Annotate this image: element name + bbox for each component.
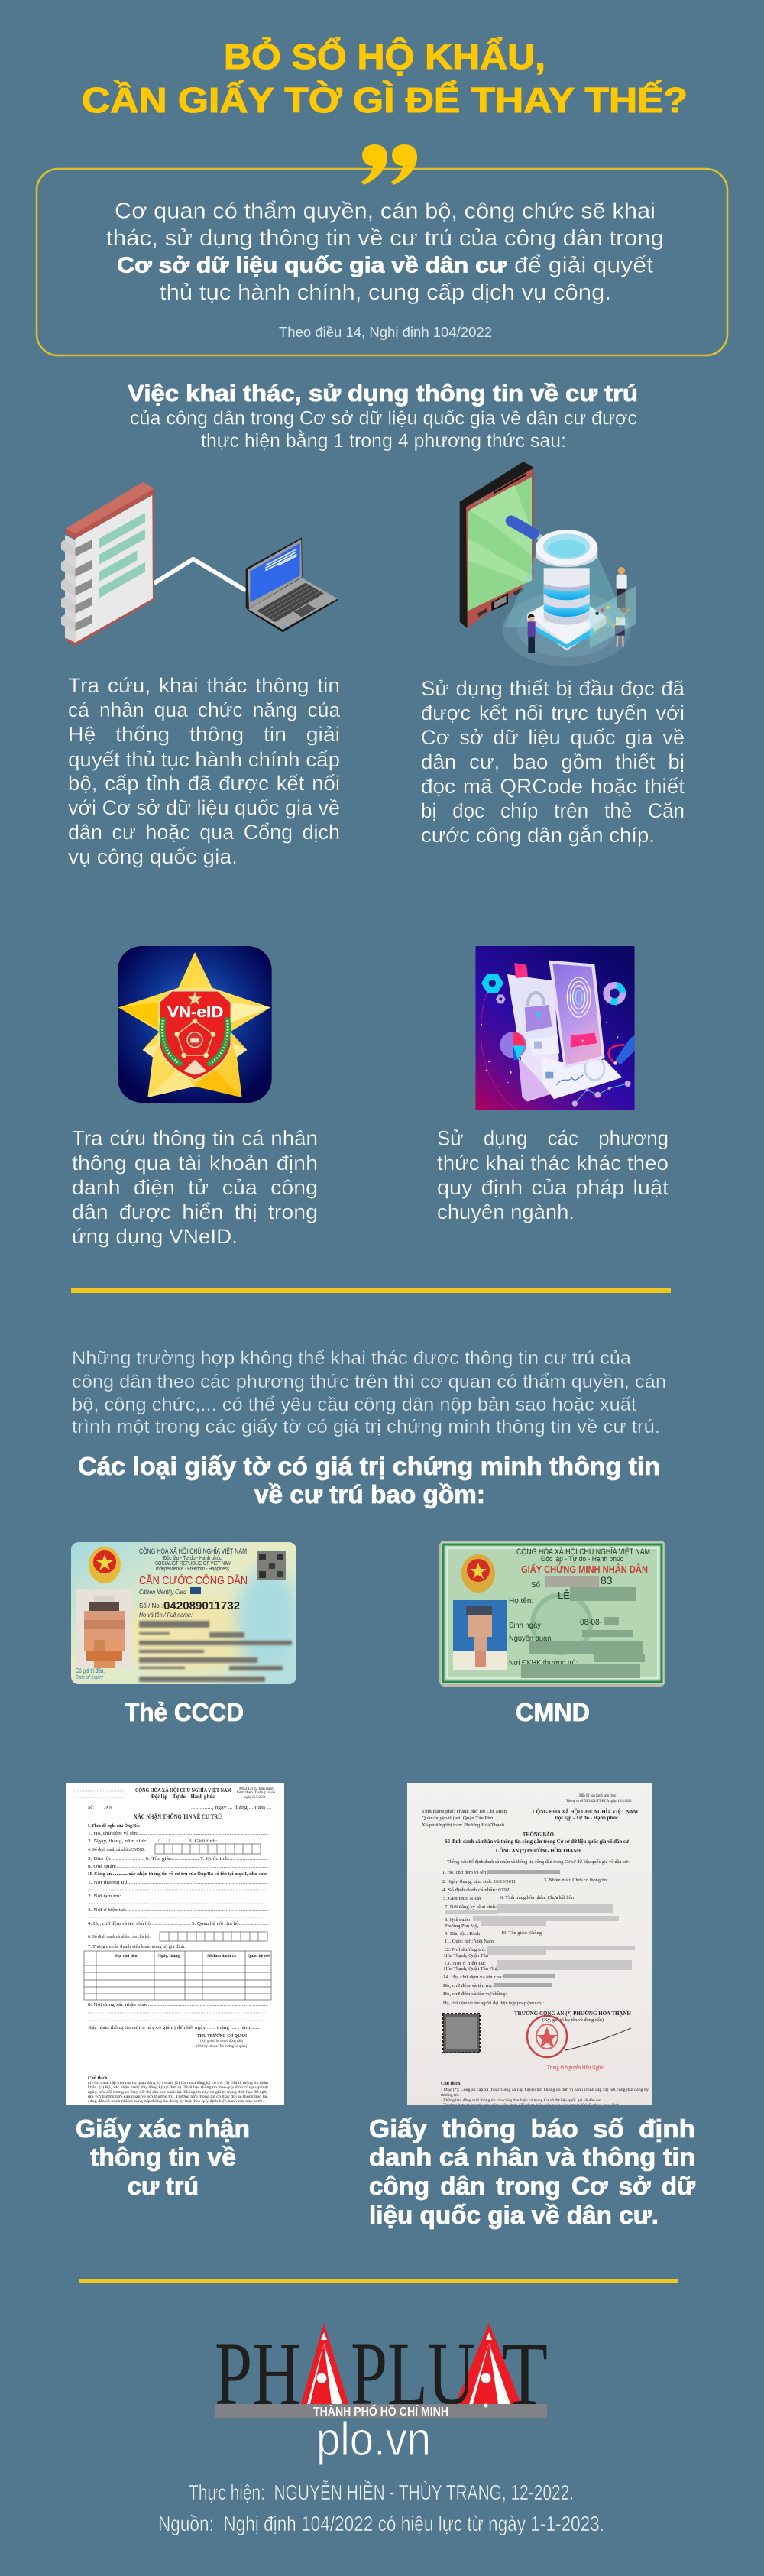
text: method 1: với Cơ sở dữ liệu quốc gia về: [68, 796, 340, 819]
image: residence confirmation form: ngày 15/5/2021: [244, 1796, 266, 1800]
image: personal identification notice: CỘNG HÒA XÃ HỘI CHỦ NGHĨA VIỆT NAM: [533, 1809, 638, 1815]
text: method 3: danh điện tử của công: [72, 1176, 318, 1199]
image: personal identification notice: 11. Quốc tịch: Việt Nam: [445, 1939, 494, 1944]
image: residence confirmation form: kèm theo Thông tư số: [237, 1791, 276, 1795]
image: residence confirmation form: (Ký, ghi rõ họ tên và đóng dấu): [200, 2040, 243, 2043]
image: residence confirmation form: công dân có trách nhiệm cung cấp thông tin đúng sự thật theo quy định hiện hành của nhà nước.: [88, 2100, 264, 2104]
image: personal identification notice: Thông tư số 59/2021/TT-BCA ngày 15/5/2021: [566, 1798, 632, 1803]
image: personal identification notice: (Ký, ghi rõ họ tên và đóng dấu): [542, 2017, 604, 2023]
image: residence confirmation form: Quan hệ với: [248, 1954, 270, 1959]
quote text: thủ tục hành chính, cung cấp dịch vụ công.: [160, 280, 611, 305]
image: old identity card: Sinh ngày: [509, 1622, 541, 1630]
image: residence confirmation form: THỦ TRƯỞNG CƠ QUAN: [197, 2033, 248, 2039]
stamp and signature: [527, 2016, 631, 2057]
logo: Pháp Luật: PLU: [351, 2324, 475, 2424]
image: personal identification notice: 14. Họ, chữ đệm và tên cha:: [443, 1975, 503, 1980]
title: [82, 37, 688, 120]
image: residence confirmation form: 4. Số định danh cá nhân/CMND:: [88, 1847, 145, 1852]
image: residence confirmation form: 6. Số định danh cá nhân của chủ hộ:: [88, 1934, 151, 1939]
image: residence confirmation form: (Chữ ký số của Thủ trưởng cơ quan): [196, 2045, 247, 2049]
text: method 1: Hệ thống thông tin giải: [68, 723, 340, 746]
credits: Nguồn: Nghị định 104/2022 có hiệu lực từ ngày 1-1-2023.: [158, 2512, 604, 2535]
image: citizen ID card: Citizen Identity Card: [139, 1589, 186, 1596]
image: citizen ID card: [71, 1542, 298, 1684]
image: personal identification notice: TRƯỞNG CÔNG AN (*) PHƯỜNG HÒA THẠNH: [514, 2011, 632, 2017]
image: personal identification notice: thường trú.: [441, 2093, 460, 2098]
image: personal identification notice: - Thông báo đồng thời thông tin của công dân hiện có trong Cơ sở dữ liệu quốc gia về dân cư.: [441, 2098, 602, 2103]
image: residence confirmation form: .............., ngày ... tháng ... năm ...: [191, 1806, 272, 1810]
text: method 2: cước công dân gắn chíp.: [421, 823, 655, 847]
image: personal identification notice: [407, 1783, 652, 2108]
image: personal identification notice: - Trường hợp thông tin của công dân thay đổi, thực hiện cập nhật vào cơ sở dữ liệu theo quy định.: [441, 2102, 621, 2108]
icon: digital security app: »: [581, 1037, 584, 1044]
image: personal identification notice: 1. Họ, chữ đệm và tên:: [442, 1870, 487, 1875]
image: personal identification notice: - Mục (*): Công an cấp xã (hoặc Công an cấp huyện nơi không có đơn vị hành chính cấp xã) nơi công dân đăng ký: [441, 2087, 649, 2092]
quote text: thác, sử dụng thông tin về cư trú của công dân trong: [106, 226, 664, 251]
image: personal identification notice: 3. Nhóm máu: Chưa có thông tin: [544, 1878, 607, 1883]
text: method 2: được kết nối trực tuyến với: [421, 702, 685, 724]
image: personal identification notice: Xã/phường/thị trấn: Phường Hòa Thạnh: [422, 1823, 505, 1828]
text: method 4: Sử dụng các phương: [437, 1126, 668, 1149]
image: residence confirmation form: 1. Nơi thường trú:...................................................................................................: [88, 1881, 269, 1885]
image: personal identification notice: 4. Số định danh cá nhân: 0792........: [442, 1887, 520, 1893]
image: citizen ID card: SOCIALIST REPUBLIC OF VIET NAM: [155, 1561, 231, 1567]
image: personal identification notice: 8. Quê quán:: [445, 1917, 471, 1923]
text: method 4: quy định của pháp luật: [437, 1176, 669, 1199]
emblem: [89, 1547, 121, 1583]
image: personal identification notice: 5. Giới tính: NAM: [443, 1896, 481, 1901]
image: personal identification notice: 13. Nơi ở hiện tại:: [444, 1961, 486, 1966]
credits: Thực hiện: NGUYỄN HIỀN - THÙY TRANG, 12-2022.: [189, 2480, 574, 2504]
image: old identity card: Độc lập - Tự do - Hạnh phúc: [541, 1555, 623, 1563]
text: method 4: chuyên ngành.: [437, 1201, 575, 1223]
logo: Pháp Luật: THÀNH PHỐ HỒ CHÍ MINH: [313, 2403, 448, 2419]
shield label: VN-eID: [167, 1003, 223, 1021]
text: method 3: dân được hiển thị trong: [72, 1201, 318, 1223]
QR code: [443, 2014, 480, 2053]
image: residence confirmation form: Mẫu CT07 ban hành: [239, 1787, 275, 1791]
credits: [158, 2480, 604, 2535]
image: personal identification notice: 12. Nơi thường trú:: [444, 1947, 486, 1952]
text block: exceptions paragraph: bộ, công chức,... có thể yêu cầu công dân nộp bản sao hoặc xuất: [72, 1395, 636, 1415]
quote text: Cơ quan có thẩm quyền, cán bộ, công chức sẽ khai: [115, 199, 656, 223]
image: personal identification notice: Phường Phú Mỹ,: [445, 1923, 479, 1929]
heading: methods: của công dân trong Cơ sở dữ liệu quốc gia về dân cư được: [130, 408, 637, 429]
text: method 3: thông qua tài khoản định: [72, 1152, 318, 1175]
portrait: [453, 1600, 507, 1670]
text: method 2: dân cư, bao gồm thiết bị: [421, 750, 685, 773]
text: method 2: Cơ sở dữ liệu quốc gia về: [421, 726, 685, 749]
portrait: [76, 1589, 132, 1668]
image: citizen ID card: Độc lập - Tự do - Hạnh phúc: [163, 1556, 222, 1561]
image: residence confirmation form: Ngày, tháng: [158, 1954, 180, 1959]
text: method 4: thức khai thác khác theo: [437, 1152, 668, 1175]
image: residence confirmation form: 3. Nơi ở hiện tại:.....................................................................................................: [88, 1908, 269, 1913]
people: [528, 567, 627, 653]
image: citizen ID card: 042089011732: [163, 1599, 240, 1612]
blurred details: [521, 1576, 645, 1678]
image: residence confirmation form: (1) Cơ quan cấp trên của cơ quan đăng ký cư trú. (2) Cơ quan đăng ký cư trú. (3) Ghi rõ thông tin nhân: [88, 2082, 269, 2085]
text: method 1: Tra cứu, khai thác thông tin: [68, 674, 340, 697]
image: citizen ID card: Số / No.:: [139, 1602, 163, 1609]
image: residence confirmation form: 2. Ngày, tháng, năm sinh: ....../....../...... 3. Giới tính:...................................: [88, 1839, 269, 1844]
caption: identification notice: công dân trong Cơ sở dữ: [369, 2172, 695, 2200]
quote text: Cơ sở dữ liệu quốc gia về dân cư: [117, 254, 507, 278]
caption: identification notice: Giấy thông báo số định: [369, 2114, 695, 2143]
title: BỎ SỔ HỘ KHẨU,: [224, 37, 545, 76]
icon: phone and magnifier reader: [460, 462, 636, 666]
image: personal identification notice: Thông báo Số định danh cá nhân và thông tin công dân trong Cơ sở dữ liệu quốc gia về dân cư:: [447, 1859, 629, 1865]
image: old identity card: 83: [601, 1574, 613, 1586]
image: citizen ID card: CỘNG HÒA XÃ HỘI CHỦ NGHĨA VIỆT NAM: [139, 1547, 247, 1555]
image: residence confirmation form: ngày, nếu đối tượng có thay đổi thì cần xác nhận lại. Thông tin này có giá trị trong thời hạn 30 ngày: [88, 2090, 269, 2095]
text: method 1: vụ công quốc gia.: [68, 845, 238, 868]
image: personal identification notice: Độc lập - Tự do - Hạnh phúc: [555, 1815, 618, 1821]
image: citizen ID card: Date of expiry: [76, 1675, 103, 1680]
image: personal identification notice: 9. Dân tộc: Kinh: [445, 1931, 481, 1936]
image: residence confirmation form: Họ, chữ đệm: [115, 1954, 138, 1959]
text block: exceptions paragraph: [72, 1348, 666, 1437]
text: method 1: quyết thủ tục hành chính cấp: [68, 748, 340, 771]
text: method 3: [72, 1126, 318, 1248]
text: method 3: ứng dụng VNeID.: [72, 1225, 238, 1248]
redaction blurs: [445, 1870, 635, 1987]
image: residence confirmation form: I. Theo đề nghị của Ông/Bà:: [88, 1823, 140, 1829]
heading: methods: thực hiện bằng 1 trong 4 phương thức sau:: [201, 429, 566, 452]
text: method 3: Tra cứu thông tin cá nhân: [72, 1126, 318, 1149]
image: residence confirmation form: CỘNG HÒA XÃ HỘI CHỦ NGHĨA VIỆT NAM: [135, 1787, 231, 1793]
image: residence confirmation form: II. Công an ............ xác nhận thông tin về cư trú của Ông/Bà có tên tại mục I, như sau:: [88, 1871, 267, 1877]
image: residence confirmation form: Xác nhận thông tin cư trú này có giá trị đến hết ngày ...... tháng ...... năm ......: [88, 2025, 261, 2030]
image: personal identification notice: 6. Tình trạng hôn nhân: Chưa kết hôn: [500, 1895, 575, 1900]
image: residence confirmation form: 8. Nội dung xác nhận khác:.....................................................................................: [88, 2003, 269, 2007]
logo: Pháp Luật: PH: [215, 2324, 301, 2424]
text: method 1: [68, 674, 341, 868]
text block: exceptions paragraph: trình một trong các giấy tờ có giá trị chứng minh thông tin về cư trú.: [72, 1417, 660, 1437]
image: old identity card: Số: [531, 1580, 541, 1589]
icon: digital security app: [475, 946, 635, 1110]
website: plo.vn: [316, 2413, 431, 2466]
image: personal identification notice: Quận/huyện/thị xã: Quận Tân Phú: [422, 1816, 494, 1821]
image: citizen ID card: CĂN CƯỚC CÔNG DÂN: [139, 1574, 248, 1587]
image: residence confirmation form: đối với trường hợp cần nhận về nơi thường trú. Trường hợp thông tin có thay đổi sẽ thông báo lại.: [88, 2095, 268, 2099]
image: residence confirmation form: Số định danh cá: [207, 1953, 236, 1959]
image: old identity card: Nguyên quán:: [509, 1635, 553, 1643]
caption: CMND: CMND: [516, 1698, 590, 1726]
image: personal identification notice: Chú thích:: [441, 2082, 462, 2086]
caption: residence confirmation: cư trú: [128, 2172, 199, 2200]
image: old identity card: Họ tên:: [509, 1597, 533, 1606]
heading: document types: về cư trú bao gồm:: [254, 1480, 485, 1508]
caption: residence confirmation: [76, 2114, 250, 2200]
panel: quote box: [37, 144, 727, 355]
QR code: [257, 1551, 286, 1580]
text block: exceptions paragraph: công dân theo các phương thức trên thì cơ quan có thẩm quyền, cán: [72, 1372, 666, 1392]
caption: identification notice: [369, 2114, 695, 2229]
image: residence confirmation form: [66, 1783, 284, 2105]
quote text: để giải quyết: [514, 254, 653, 278]
text: method 2: Sử dụng thiết bị đầu đọc đã: [421, 677, 685, 700]
heading: methods: [128, 380, 638, 452]
image: old identity card: 08-08-: [580, 1618, 602, 1627]
caption: identification notice: liệu quốc gia về dân cư.: [369, 2201, 659, 2229]
image: citizen ID card: Independence - Freedom - Happiness: [156, 1567, 229, 1572]
text: method 1: cá nhân qua chức năng của: [68, 698, 341, 721]
image: personal identification notice: Trung tá Nguyễn Hữu Nghĩa: [547, 2064, 604, 2071]
image: personal identification notice: Họ, chữ đệm và tên người đại diện hợp pháp (nếu có):: [443, 2001, 544, 2006]
image: old identity card: CỘNG HÒA XÃ HỘI CHỦ NGHĨA VIỆT NAM: [516, 1547, 650, 1557]
caption: residence confirmation: Giấy xác nhận: [76, 2114, 250, 2143]
image: citizen ID card: Họ và tên / Full name:: [139, 1612, 193, 1619]
icon: document connected to laptop: [61, 482, 338, 646]
icon: VNeID app: [118, 946, 272, 1103]
image: residence confirmation form: Chú thích:: [88, 2076, 109, 2081]
image: residence confirmation form: 4. Họ, chữ đệm và tên chủ hộ:............................. 5. Quan hệ với chủ hộ:.....................: [88, 1922, 269, 1926]
image: citizen ID card: Có giá trị đến:: [76, 1667, 105, 1674]
image: personal identification notice: 7. Nơi đăng ký khai sinh:: [445, 1904, 497, 1910]
title: CẦN GIẤY TỜ GÌ ĐỂ THAY THẾ?: [82, 80, 688, 120]
image: residence confirmation form: 1. Họ, chữ đệm và tên:..............................................................................................: [88, 1832, 269, 1836]
text: method 1: bộ, cấp tỉnh đã được kết nối: [68, 772, 340, 795]
image: old identity card: [439, 1541, 665, 1687]
logo: Pháp Luật: T: [502, 2324, 548, 2424]
image: residence confirmation form: XÁC NHẬN THÔNG TIN VỀ CƯ TRÚ: [134, 1813, 222, 1820]
text: method 2: [421, 677, 685, 847]
icon: quotation mark: [361, 144, 417, 185]
image: old identity card: Nơi ĐKHK thường trú:: [509, 1659, 578, 1667]
image: residence confirmation form: Độc lập – Tự do – Hạnh phúc: [151, 1793, 215, 1800]
image: personal identification notice: Số định danh cá nhân và thông tin công dân trong Cơ sở dữ liệu quốc gia về dân cư: [445, 1839, 630, 1845]
blurred details: [139, 1621, 292, 1682]
image: personal identification notice: Họ, chữ đệm và tên mẹ:: [443, 1983, 494, 1988]
image: residence confirmation form: 2. Nơi tạm trú:.........................................................................................................: [88, 1894, 269, 1899]
text: method 2: bị đọc chíp trên thẻ Căn: [421, 799, 685, 822]
image: old identity card: GIẤY CHỨNG MINH NHÂN DÂN: [521, 1563, 648, 1575]
image: personal identification notice: THÔNG BÁO: [523, 1830, 554, 1838]
image: personal identification notice: Tỉnh/thành phố: Thành phố Hồ Chí Minh: [422, 1809, 507, 1814]
quote text: [106, 199, 664, 305]
image: residence confirmation form: 5. Dân tộc:...................... 6. Tôn giáo:.................. 7. Quốc tịch:...........................: [88, 1856, 269, 1862]
emblem: [461, 1554, 495, 1593]
caption: residence confirmation: thông tin về: [90, 2143, 236, 2171]
caption: CCCD: Thẻ CCCD: [125, 1698, 244, 1726]
image: personal identification notice: 2. Ngày, tháng, năm sinh: 10/10/2011: [442, 1879, 516, 1884]
image: personal identification notice: Họ, chữ đệm và tên vợ/chồng:: [443, 1991, 507, 1997]
image: residence confirmation form: khẩu. (4) Ký, xác nhận trước đây đăng ký tại đơn vị. Thời hạn thông tin theo quy định của pháp luật: [88, 2085, 269, 2090]
image: personal identification notice: Mẫu 01 ban hành kèm theo: [579, 1793, 616, 1798]
text block: exceptions paragraph: Những trường hợp không thể khai thác được thông tin cư trú của: [72, 1348, 631, 1369]
quote source: Theo điều 14, Nghị định 104/2022: [279, 325, 492, 340]
image: old identity card: LÊ: [558, 1589, 570, 1601]
heading: document types: [78, 1452, 660, 1508]
image: personal identification notice: Hòa Thạnh, Quận Tân Phú,: [444, 1966, 499, 1972]
image: personal identification notice: Hòa Thạnh, Quận Tân: [444, 1953, 489, 1959]
logo: Pháp Luật: [215, 2323, 548, 2424]
heading: methods: Việc khai thác, sử dụng thông tin về cư trú: [128, 380, 638, 407]
text: method 4: [437, 1126, 669, 1223]
image: residence confirmation form: 8. Quê quán:.............................................................................................................: [88, 1865, 269, 1869]
text: method 1: dân cư hoặc qua Cổng dịch: [68, 821, 340, 844]
text: method 2: đọc mã QRCode hoặc thiết: [421, 775, 685, 798]
image: personal identification notice: 10. Tôn giáo: Không: [501, 1930, 542, 1936]
image: residence confirmation form: Số: /XN: [88, 1805, 113, 1810]
caption: identification notice: danh cá nhân và thông tin: [369, 2143, 695, 2171]
heading: document types: Các loại giấy tờ có giá trị chứng minh thông tin: [78, 1452, 660, 1480]
image: residence confirmation form: 7. Thông tin các thành viên khác trong hộ gia đình:: [88, 1945, 186, 1949]
image: personal identification notice: CÔNG AN (*) PHƯỜNG HÒA THẠNH: [496, 1846, 581, 1854]
